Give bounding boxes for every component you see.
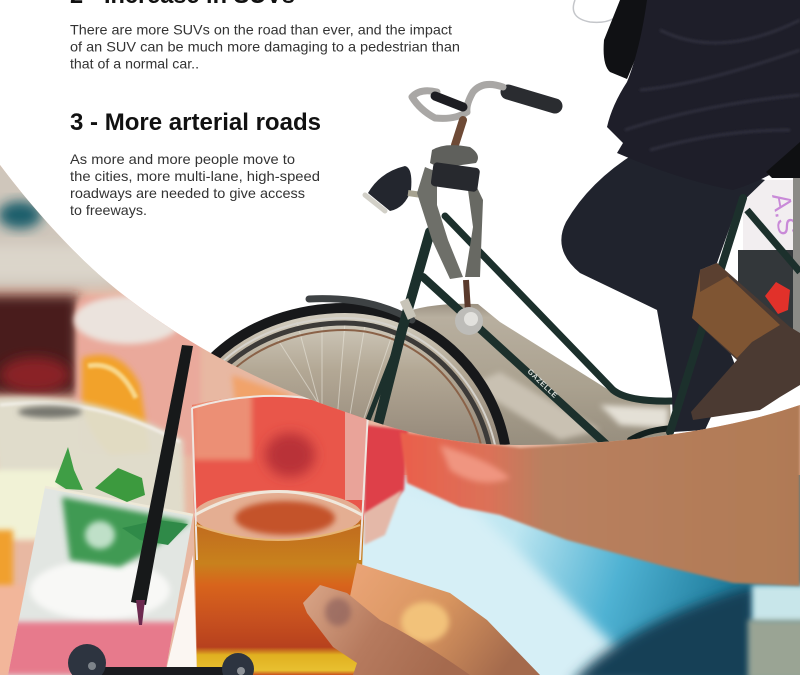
text block: arterial roads explanation: roadways are needed to give access (70, 185, 305, 201)
text block: arterial roads explanation: the cities, more multi-lane, high-speed (70, 168, 320, 184)
blurred red drink behind hand (364, 425, 408, 515)
blurred bar background (0, 160, 800, 675)
blurred back glass with orange slice (74, 296, 290, 470)
white gap between glasses (166, 555, 197, 667)
text block: arterial roads explanation: As more and more people move to (70, 151, 295, 167)
pale glass base behind hand (364, 490, 402, 545)
heading: 3 - More arterial roads: 3 - More arterial roads (70, 109, 321, 136)
blurred pale glass (0, 396, 185, 675)
light blue shirt (345, 475, 800, 675)
saddle (766, 142, 800, 178)
text block: arterial roads explanation (70, 151, 320, 218)
toy car (68, 644, 254, 675)
text panel: causes (70, 0, 460, 218)
frame brand label: GAZELLE (526, 367, 559, 400)
backpack (604, 0, 660, 79)
earphone cable (573, 0, 622, 22)
text block: SUV explanation: There are more SUVs on the road than ever, and the impact (70, 22, 452, 38)
thumb (303, 585, 470, 675)
photo: drinks being toasted (0, 160, 800, 675)
trousers (561, 150, 765, 432)
text block: arterial roads explanation: to freeways. (70, 202, 147, 218)
street ground behind bike (400, 304, 672, 445)
text block: SUV explanation (70, 22, 460, 72)
mint cocktail glass (0, 447, 200, 675)
text block: SUV explanation: of an SUV can be much more damaging to a pedestrian than (70, 38, 460, 54)
handlebars (412, 84, 555, 145)
rear wheel (210, 299, 515, 445)
bicycle frame (368, 216, 680, 445)
lock strap and padlock (417, 145, 483, 335)
forearm reaching across (400, 400, 800, 586)
beer glass (190, 390, 370, 675)
black straw (131, 345, 193, 605)
puffer jacket (607, 0, 800, 190)
mint leaves (55, 447, 83, 490)
background poster and dark wall (738, 175, 800, 340)
seat tube (670, 198, 743, 432)
fender (309, 299, 412, 320)
text block: SUV explanation: that of a normal car.. (70, 56, 199, 72)
photo: cyclist leaning on a bicycle (210, 0, 800, 445)
headlamp (365, 166, 422, 211)
red clip (765, 282, 790, 314)
hand holding glass (303, 563, 540, 675)
leather boot (691, 263, 800, 420)
